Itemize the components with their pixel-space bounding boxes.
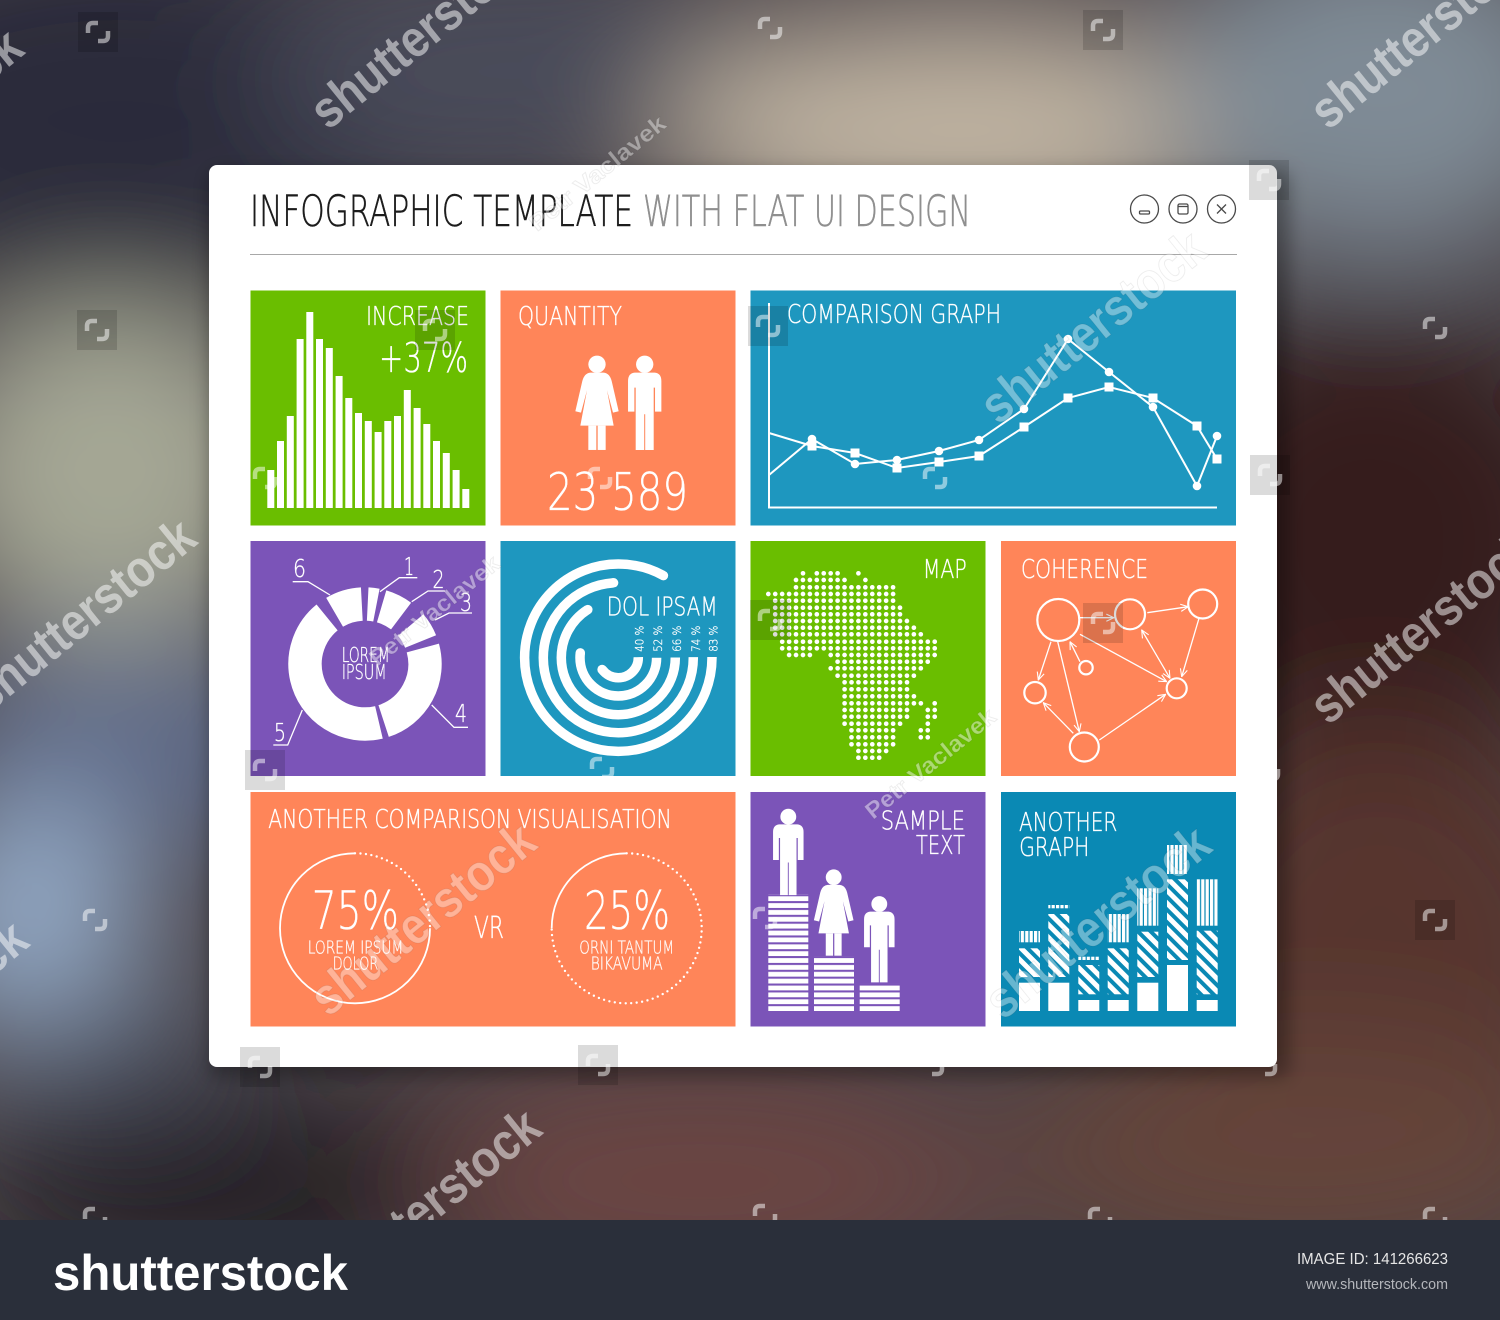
ring percentages: 52 % [651, 626, 665, 652]
panel: window [209, 165, 1277, 1067]
donut labels and leaders: 4 [455, 699, 467, 728]
watermark: author: Petr Vaclavek [860, 703, 1001, 824]
gauge: 25%: BIKAVUMA [591, 954, 663, 974]
panel: quantity [500, 290, 736, 526]
footer logo: shutterstock [53, 1245, 348, 1301]
panel: comparison graph [750, 290, 1236, 526]
donut [280, 579, 450, 749]
panel: map [750, 541, 986, 776]
donut labels and leaders: 2 [432, 565, 444, 594]
label: quantity: QUANTITY [518, 302, 622, 332]
watermark: author: Petr Vaclavek [364, 550, 505, 671]
panel: another graph [1001, 792, 1236, 1026]
label: increase: INCREASE [366, 302, 469, 332]
watermark: logos: shutterstock [969, 219, 1217, 435]
label: coherence: COHERENCE [1021, 555, 1148, 585]
panel: increase [250, 290, 486, 526]
donut labels and leaders: 3 [460, 588, 472, 617]
panel: another comparison [250, 792, 736, 1026]
donut center text [342, 643, 390, 684]
footer url: www.shutterstock.com [1305, 1276, 1448, 1293]
gauge: 25%: ORNI TANTUM [579, 937, 674, 958]
title: INFOGRAPHIC TEMPLATE [250, 187, 633, 237]
label: map: MAP [923, 555, 967, 585]
ring percentages [632, 626, 720, 652]
label: another graph: GRAPH [1019, 833, 1089, 863]
label: sample text [881, 806, 965, 861]
panel: donut chart [250, 541, 486, 776]
concentric rings [525, 564, 712, 751]
bar chart [267, 312, 469, 508]
footer bar [0, 1220, 1500, 1320]
ring percentages: 66 % [670, 626, 684, 652]
window buttons [1130, 195, 1236, 223]
dotted map of africa [768, 573, 935, 758]
image id: IMAGE ID: 141266623 [1297, 1251, 1448, 1268]
label: sample text: SAMPLE [881, 806, 965, 836]
ring percentages: 40 % [632, 626, 646, 652]
gauge: 75%: DOLOR [333, 954, 378, 974]
title: WITH FLAT UI DESIGN [643, 187, 971, 237]
label: vr: VR [474, 911, 504, 946]
panel: coherence [1001, 541, 1236, 776]
label: comparison graph: COMPARISON GRAPH [787, 300, 1001, 330]
gauge: 25%: 25% [584, 881, 670, 942]
stacked bar chart [1019, 845, 1218, 1011]
label: another graph [1019, 808, 1117, 863]
watermark: logos: shutterstock [974, 814, 1222, 1030]
ring percentages: 83 % [706, 626, 720, 652]
heading: another comparison: ANOTHER COMPARISON VISUALISATION [268, 805, 672, 835]
value: 23 589: 23 589 [547, 463, 688, 523]
watermark: author: Petr Vaclavek [524, 110, 671, 236]
label: sample text: TEXT [916, 831, 965, 861]
label: dol ipsam: DOL IPSAM [607, 593, 718, 623]
gauge: 75% [280, 853, 430, 1003]
ring percentages: 74 % [689, 626, 703, 652]
header divider [250, 254, 1237, 255]
gauge: 75%: LOREM IPSUM [308, 937, 403, 958]
panel: sample text [750, 792, 986, 1026]
line chart [769, 303, 1222, 508]
watermark: author [364, 110, 1001, 824]
window shadow [209, 171, 1289, 1077]
gauge: 75%: 75% [312, 881, 399, 942]
network graph [1024, 590, 1217, 762]
donut labels and leaders [273, 552, 472, 747]
donut labels and leaders: 5 [274, 718, 286, 747]
gauge: 25% [552, 853, 702, 1003]
panel: radial chart [500, 541, 736, 776]
donut labels and leaders: 6 [293, 554, 306, 583]
donut center text: LOREM [342, 643, 390, 667]
icon: woman and man [575, 356, 661, 450]
watermark: logos: shutterstock [304, 1097, 552, 1313]
value: +37%: +37% [379, 334, 468, 382]
donut center text: IPSUM [342, 660, 387, 684]
donut labels and leaders: 1 [404, 552, 414, 581]
label: another graph: ANOTHER [1019, 808, 1117, 838]
watermark: logos: shutterstock [299, 811, 547, 1027]
people on stacks [768, 809, 900, 1011]
